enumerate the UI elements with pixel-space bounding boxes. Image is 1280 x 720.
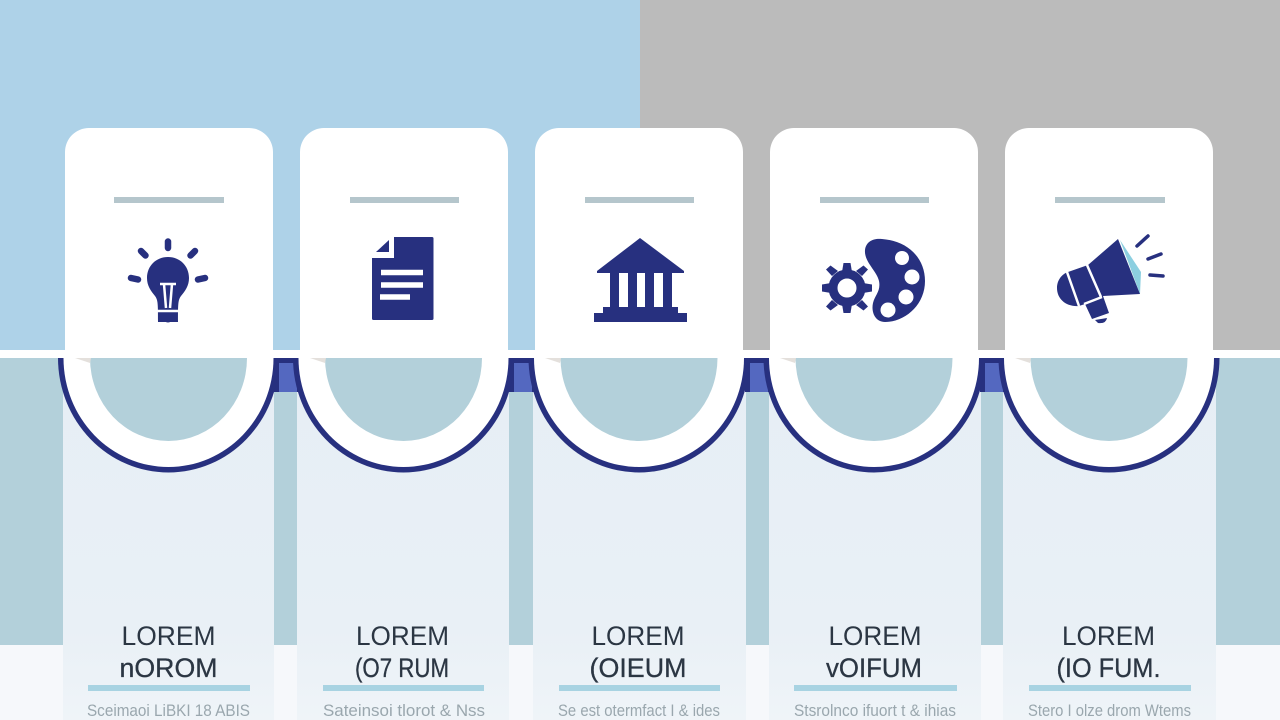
- card 3 rule: [585, 197, 694, 203]
- heading 4: vOIFUM: [826, 653, 922, 683]
- heading 1: [120, 621, 218, 683]
- underline 3: [559, 685, 720, 691]
- lower text panels: [63, 358, 1216, 720]
- caption 4: Stsrolnco ifuort t & ihias: [794, 701, 956, 720]
- icon: institution building: [594, 238, 687, 322]
- card 3: [535, 128, 743, 358]
- icon: megaphone: [1057, 236, 1163, 323]
- heading 3: LOREM: [592, 621, 684, 651]
- underline 4: [794, 685, 957, 691]
- card 2: [300, 128, 508, 358]
- arc 3: [528, 358, 750, 472]
- heading 2: LOREM: [356, 621, 449, 651]
- step 1: [58, 128, 279, 720]
- step 2: [293, 128, 514, 720]
- step 5: [998, 128, 1220, 720]
- underline 5: [1029, 685, 1191, 691]
- arc 4: [764, 358, 984, 472]
- icon: gear and palette: [822, 239, 925, 322]
- caption 5: Stero I olze drom Wtems: [1028, 701, 1191, 720]
- heading 1: nOROM: [120, 653, 218, 683]
- heading 2: (O7 RUM: [355, 653, 449, 683]
- caption 1: Sceimaoi LiBKI 18 ABIS: [87, 701, 250, 720]
- horizontal white band: [0, 350, 1280, 358]
- heading 2: [355, 621, 449, 683]
- caption 3: Se est otermfact I & ides: [558, 701, 720, 720]
- heading 1: LOREM: [122, 621, 216, 651]
- heading 3: (OIEUM: [590, 653, 686, 683]
- heading 5: (IO FUM.: [1056, 653, 1160, 683]
- heading 5: LOREM: [1062, 621, 1155, 651]
- card 5 rule: [1055, 197, 1165, 203]
- underline 1: [88, 685, 250, 691]
- underline 2: [323, 685, 484, 691]
- heading 5: [1056, 621, 1160, 683]
- card 4: [770, 128, 978, 358]
- connectors between arcs: [274, 358, 1007, 392]
- card 2 rule: [350, 197, 459, 203]
- arc 1: [58, 358, 279, 472]
- card 1: [65, 128, 273, 358]
- step 3: [528, 128, 750, 720]
- card 5: [1005, 128, 1213, 358]
- heading 4: LOREM: [828, 621, 922, 651]
- card 1 rule: [114, 197, 224, 203]
- arc 2: [293, 358, 514, 472]
- caption 2: Sateinsoi tlorot & Nss: [323, 701, 485, 720]
- icon: light bulb: [131, 242, 205, 322]
- step 4: [764, 128, 984, 720]
- icon: document: [372, 237, 434, 320]
- heading 4: [826, 621, 922, 683]
- heading 3: [590, 621, 686, 683]
- card 4 rule: [820, 197, 929, 203]
- arc 5: [998, 358, 1220, 472]
